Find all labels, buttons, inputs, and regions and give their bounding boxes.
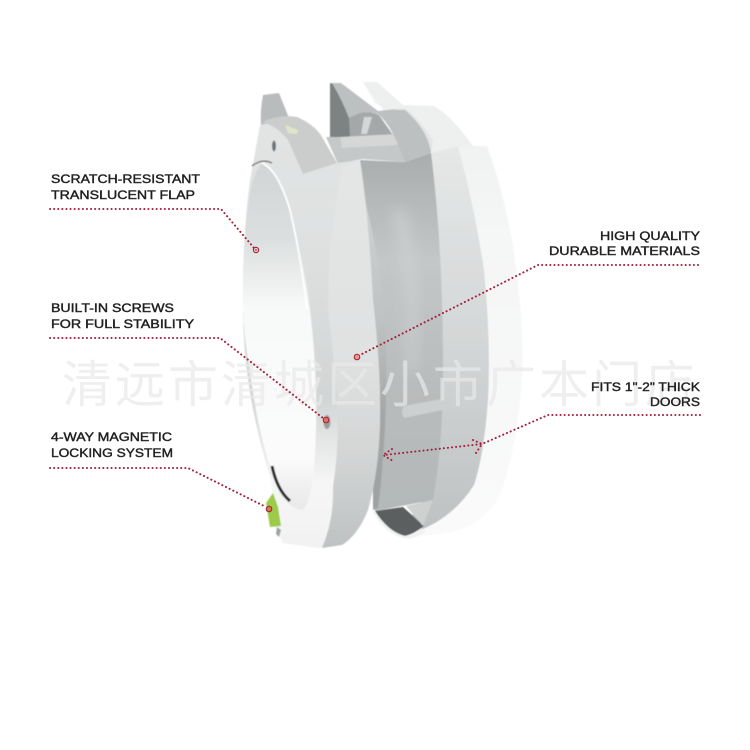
bottom tunnel light — [406, 500, 433, 526]
label: doors: DOORS — [650, 395, 700, 409]
label: locking system: LOCKING SYSTEM — [51, 446, 173, 460]
callout line: scratch-resistant flap — [50, 209, 259, 253]
label: scratch-resistant flap: SCRATCH-RESISTANT — [51, 172, 201, 186]
label: durable materials: DURABLE MATERIALS — [549, 244, 700, 258]
front plate rim — [322, 160, 380, 548]
tunnel highlight — [392, 210, 416, 370]
flap highlight arc — [262, 163, 307, 310]
flap bottom shadow — [272, 466, 290, 501]
callout line: durable materials — [354, 265, 698, 360]
screw — [324, 415, 330, 429]
front ear — [261, 93, 289, 127]
callout line: door thickness double arrow — [383, 415, 700, 461]
label: 4-way magnetic: 4-WAY MAGNETIC — [51, 430, 172, 444]
label: translucent flap: TRANSLUCENT FLAP — [51, 188, 195, 202]
arch light — [361, 117, 372, 134]
back plate — [363, 82, 523, 536]
top pin — [340, 134, 398, 148]
watermark: 清远市清城区小市广本门店 — [62, 357, 698, 413]
front plate — [243, 117, 380, 548]
centre tunnel — [360, 153, 443, 511]
label: for full stability: FOR FULL STABILITY — [51, 317, 194, 331]
rod — [402, 398, 447, 418]
callout line: magnetic lock — [50, 468, 272, 512]
tunnel side strip — [362, 190, 386, 510]
green magnet — [266, 493, 281, 527]
product: exploded pet door — [243, 82, 523, 548]
dark frame — [330, 83, 352, 137]
arch interior — [349, 112, 393, 137]
label: fits thickness: FITS 1"-2" THICK — [591, 380, 700, 394]
hole — [272, 140, 276, 152]
bottom opening dark — [375, 507, 424, 536]
magnet screws — [276, 527, 281, 537]
under pin area — [326, 134, 405, 164]
label: built-in screws: BUILT-IN SCREWS — [51, 301, 174, 315]
flap — [243, 163, 316, 510]
top edge band — [262, 116, 337, 174]
bottom white lip — [373, 511, 426, 539]
callout line: built-in screws — [50, 338, 329, 423]
label: high quality: HIGH QUALITY — [600, 229, 700, 243]
back plate inner band — [405, 146, 489, 529]
flap top shadow — [252, 161, 272, 166]
green light on top — [285, 125, 298, 134]
top wing of tunnel — [332, 83, 433, 162]
back plate translucent top — [363, 82, 473, 153]
